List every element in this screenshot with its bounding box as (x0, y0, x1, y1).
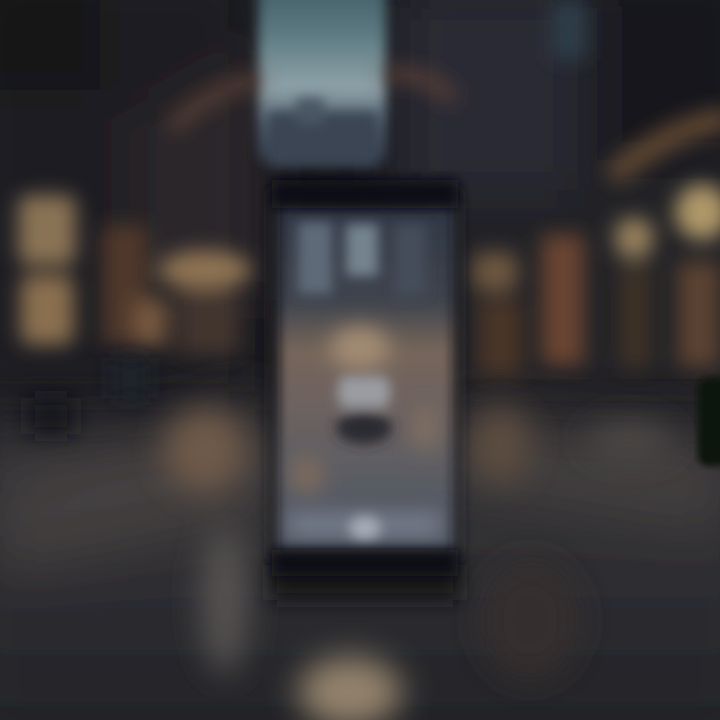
street reflections (163, 407, 675, 720)
smartphone (270, 180, 460, 600)
phone bottom bar (272, 550, 458, 576)
left dark figures (28, 358, 148, 434)
phone frame (272, 190, 458, 560)
phone screen (278, 205, 456, 550)
buildings left (0, 0, 265, 410)
car silhouette on screen (336, 376, 392, 540)
right dark plant (698, 378, 720, 466)
distant tower right (552, 0, 586, 60)
warm arches (175, 74, 720, 170)
right shopfront lights (472, 184, 720, 375)
sky (258, 0, 386, 160)
phone shadow on ground (270, 565, 460, 600)
screen window panes (298, 222, 426, 296)
phone top bar (272, 180, 458, 208)
distant skyline (268, 98, 378, 167)
buildings right (390, 0, 720, 410)
street (0, 395, 720, 720)
screen glow and car (287, 326, 442, 538)
left shopfront lights (18, 195, 251, 355)
